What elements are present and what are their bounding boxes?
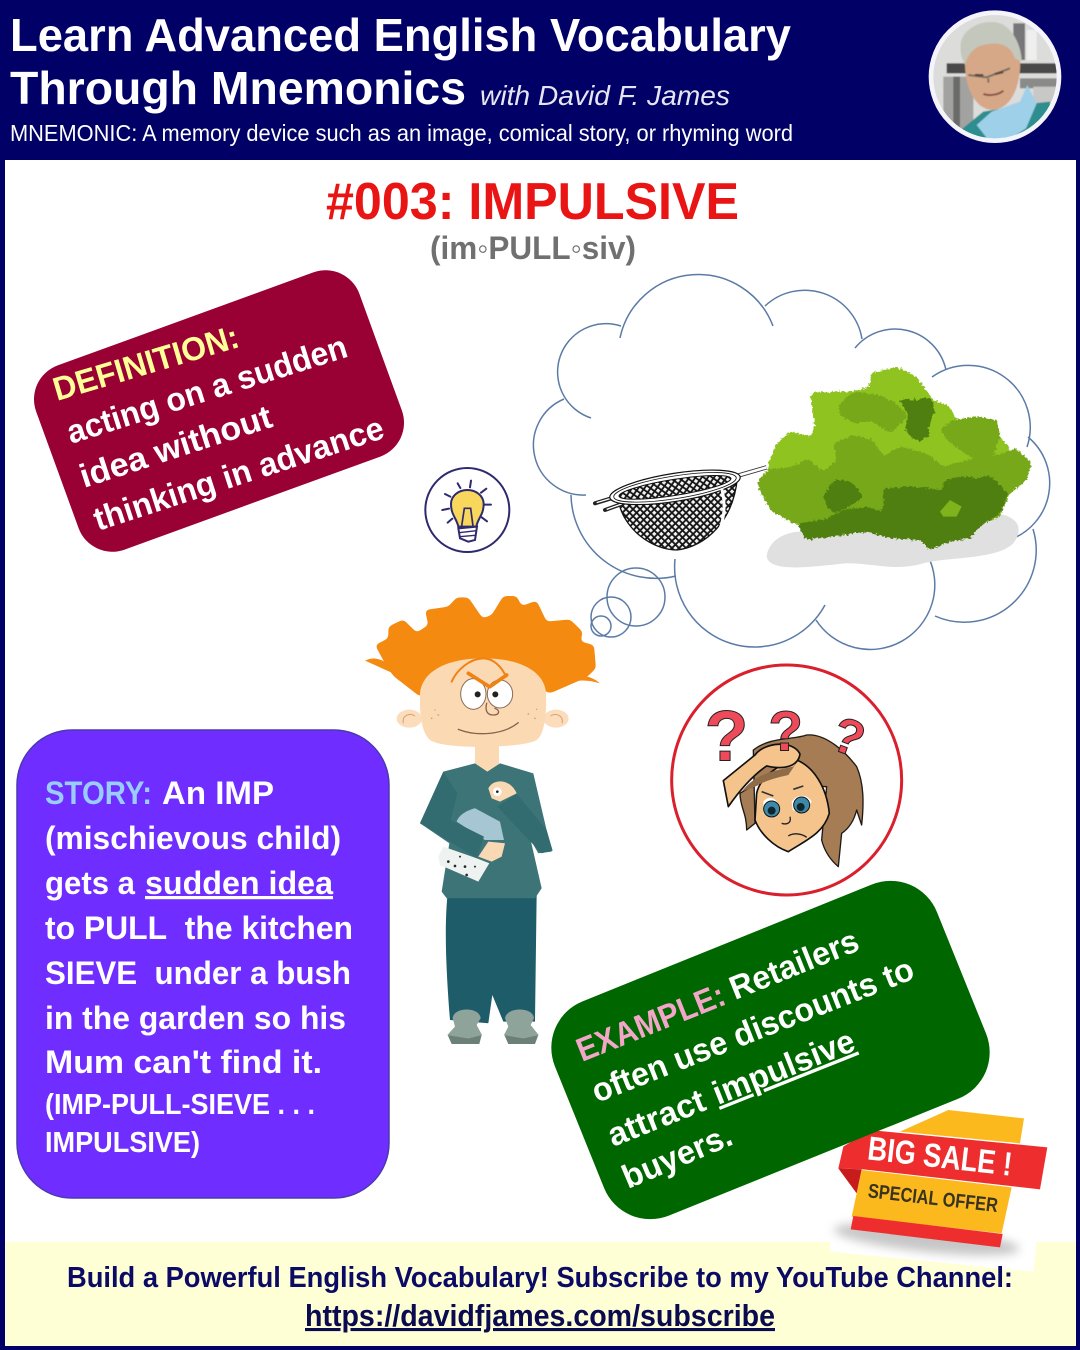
story text: sudden idea xyxy=(145,865,333,901)
question marks: ? xyxy=(705,697,748,777)
definition text: acting on a sudden xyxy=(62,328,352,451)
author credit: with David F. James xyxy=(480,80,730,111)
story label: STORY: xyxy=(45,775,152,811)
boy's hair xyxy=(365,596,600,697)
boy's nose and mouth xyxy=(458,703,518,734)
special offer text: SPECIAL OFFER xyxy=(867,1180,1000,1217)
example text: attract xyxy=(602,1081,710,1154)
boy's eyes xyxy=(461,679,513,709)
portrait photo xyxy=(930,10,1063,143)
boy's brows xyxy=(468,673,507,687)
panel: story xyxy=(17,730,389,1198)
badge red ribbon xyxy=(838,1130,1047,1189)
boy's trousers xyxy=(446,895,537,1023)
story text: (mischievous child) xyxy=(45,820,341,856)
big sale text: BIG SALE ! xyxy=(866,1131,1014,1184)
example text: impulsive xyxy=(707,1022,860,1112)
question marks: ? xyxy=(825,705,873,769)
example text: often use discounts to xyxy=(586,950,919,1110)
title line 2: Through Mnemonics xyxy=(10,62,466,114)
boy's ears xyxy=(397,710,569,728)
story text: Mum can't find it. xyxy=(45,1044,322,1080)
held sieve xyxy=(457,808,504,840)
girl's nose and mouth xyxy=(782,817,807,837)
graphic: big sale badge xyxy=(830,1110,1047,1272)
thought bubble small circles xyxy=(591,568,665,637)
boy's freckles xyxy=(431,709,537,719)
boy's shoes xyxy=(447,1010,539,1044)
icon: kitchen sieve xyxy=(595,463,767,550)
story text: gets a xyxy=(45,865,135,901)
story text: IMPULSIVE) xyxy=(45,1127,200,1159)
mnemonic definition: MNEMONIC: A memory device such as an image, comical story, or rhyming word xyxy=(10,120,793,146)
story text: An IMP xyxy=(162,775,274,811)
girl's hair xyxy=(740,735,863,867)
panel: example xyxy=(536,866,1005,1234)
thought bubble cloud xyxy=(533,275,1050,649)
girl's eyes xyxy=(762,786,812,818)
sweater right sleeve xyxy=(497,794,553,853)
icon: bush xyxy=(757,367,1032,567)
badge shadow xyxy=(833,1217,1021,1262)
girl's arm and hand xyxy=(723,744,800,807)
story text xyxy=(45,775,353,1159)
pronunciation: (im◦PULL◦siv) xyxy=(430,230,636,266)
subscribe line: Build a Powerful English Vocabulary! Subscribe to my YouTube Channel: xyxy=(67,1262,1013,1294)
story text: SIEVE under a bush xyxy=(45,955,351,991)
title line 1: Learn Advanced English Vocabulary xyxy=(10,9,791,61)
story text: in the garden so his xyxy=(45,1000,346,1036)
header xyxy=(10,9,793,146)
definition label: DEFINITION: xyxy=(48,318,243,408)
boy's sweater xyxy=(420,763,552,898)
definition text: idea without xyxy=(75,398,276,495)
footer band background xyxy=(5,1242,1076,1346)
story text: (IMP-PULL-SIEVE . . . xyxy=(45,1089,315,1121)
icon: light bulb xyxy=(425,468,509,552)
footer call to action xyxy=(67,1262,1013,1333)
story text: to PULL the kitchen xyxy=(45,910,353,946)
definition text: thinking in advance xyxy=(89,409,388,538)
girl's face xyxy=(755,760,829,852)
character: mischievous imp boy xyxy=(365,596,600,1044)
boy's forelock xyxy=(452,658,506,682)
example label: EXAMPLE: xyxy=(571,976,730,1068)
badge yellow panel xyxy=(852,1170,1012,1233)
example text: Retailers xyxy=(724,922,864,1006)
panel: definition xyxy=(24,260,414,562)
heading: word number and word: #003: IMPULSIVE xyxy=(326,173,739,231)
boy's face xyxy=(420,658,546,747)
girl's fringe xyxy=(742,762,797,792)
example text xyxy=(586,922,919,1195)
oven mitt xyxy=(438,847,489,882)
badge back panel xyxy=(900,1110,1024,1143)
definition text xyxy=(62,328,388,538)
question marks: ? xyxy=(768,701,803,764)
badge white backing xyxy=(830,1242,1037,1272)
badge bottom strip xyxy=(851,1216,1003,1247)
question marks xyxy=(705,697,873,777)
icon: confused girl in red circle xyxy=(672,665,902,895)
boy's hands xyxy=(478,781,517,862)
ribbon fold xyxy=(838,1168,862,1193)
sweater left sleeve xyxy=(420,772,484,858)
subscribe link: https://davidfjames.com/subscribe xyxy=(305,1298,775,1333)
boy's neck xyxy=(475,745,499,773)
bush shadow xyxy=(767,513,1019,567)
example text: buyers. xyxy=(616,1116,738,1195)
